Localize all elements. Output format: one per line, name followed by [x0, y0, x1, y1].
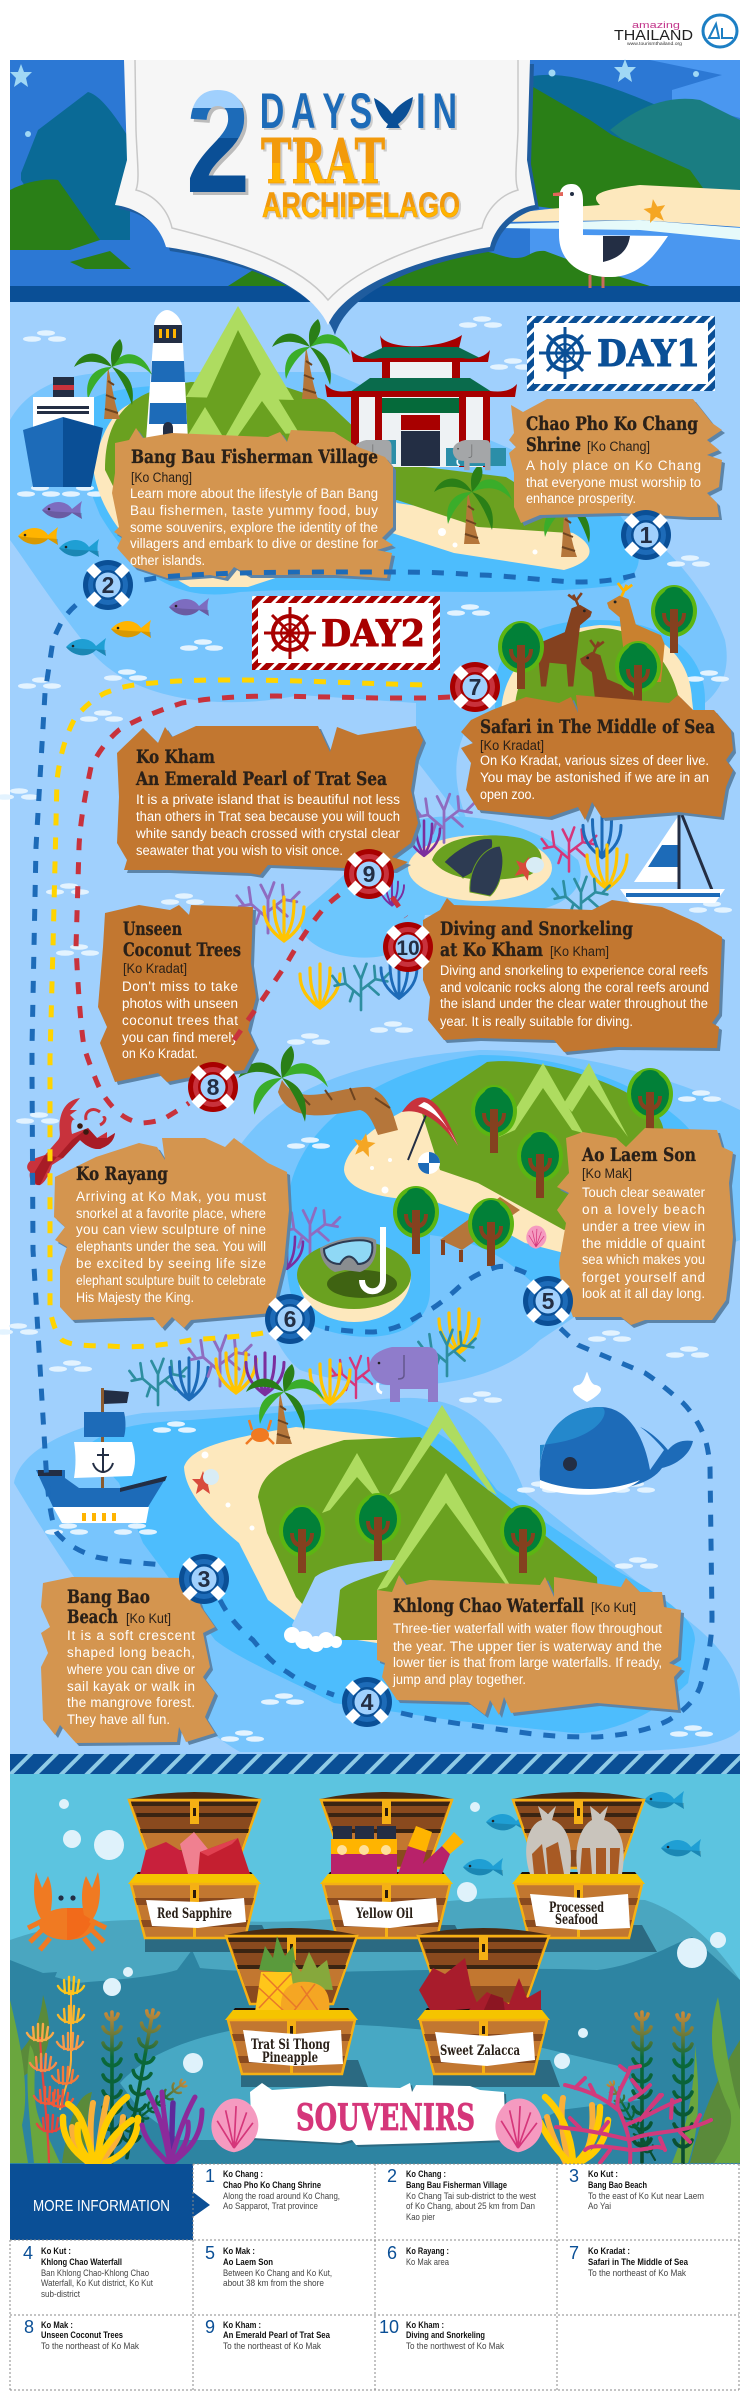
- icon: shell: [211, 2098, 258, 2152]
- card: Diving and Snorkeling: and volcanic rocks along the coral reefs around: [440, 980, 709, 995]
- entry 7: Ko Kradat :: [588, 2246, 630, 2257]
- card: Bang Bao Beach: It is a soft crescent: [67, 1628, 195, 1643]
- entry 3: 3: [569, 2166, 579, 2186]
- card: Bang Bao Beach: shaped long beach,: [67, 1645, 195, 1660]
- icon: stone elephant: [354, 440, 392, 470]
- card: Chao Pho Ko Chang Shrine: [509, 399, 722, 523]
- entry 2: of Ko Chang, about 25 km from Dan: [406, 2201, 535, 2212]
- sea layer: Ko Kham lagoon: [300, 816, 581, 958]
- entry 1: 1: [205, 2166, 215, 2186]
- sea layer: Ao Laem Son inner: [286, 1055, 690, 1337]
- entry 8: Ko Mak :: [41, 2320, 73, 2331]
- logo: Amazing Thailand: THAILAND: [614, 27, 693, 44]
- entry 6: Ko Mak area: [406, 2257, 450, 2268]
- life ring 1: 1: [640, 522, 653, 548]
- entry 3: Bang Bao Beach: [588, 2180, 647, 2191]
- card: Khlong Chao Waterfall: lower tier is that from large waterfalls. If ready,: [393, 1655, 662, 1670]
- icon: pirate ship: [36, 1388, 167, 1523]
- life ring 3: 3: [198, 1566, 210, 1592]
- card: Bang Bau Fisherman Village: Learn more about the lifestyle of Ban Bang: [130, 486, 378, 501]
- card: Bang Bau Fisherman Village: [Ko Chang]: [131, 470, 192, 485]
- icon: shell: [495, 2098, 542, 2152]
- card: Bang Bao Beach: They have all fun.: [67, 1712, 170, 1727]
- more information box: [10, 2164, 210, 2240]
- entry 10: 10: [379, 2317, 399, 2337]
- sea layer: Ao Laem Son: [239, 1050, 740, 1385]
- icon: beach ball: [418, 1152, 440, 1174]
- entry 9: An Emerald Pearl of Trat Sea: [223, 2330, 331, 2341]
- icon: waterfall foam: [284, 1627, 342, 1652]
- card: Safari in The Middle of Sea: On Ko Kradat, various sizes of deer live.: [480, 753, 709, 768]
- icon: seagull: [553, 184, 668, 288]
- life ring 3: [179, 1554, 229, 1604]
- card: Khlong Chao Waterfall: Three-tier waterfall with water flow throughout: [393, 1621, 662, 1636]
- corals: Ko Kham: [237, 794, 627, 1010]
- coral: yellow left: [63, 2097, 138, 2163]
- route: day 2 red dashed path: [76, 696, 450, 1123]
- entry 7: [569, 2243, 689, 2279]
- badge: Day 2: DAY2: [321, 613, 425, 655]
- entry 10: Ko Kham :: [406, 2320, 444, 2331]
- logo: Amazing Thailand: amazing: [632, 20, 680, 30]
- chest: Processed Seafood: [512, 1792, 645, 1938]
- entry 7: To the northeast of Ko Mak: [588, 2268, 686, 2279]
- card: Diving and Snorkeling: [Ko Kham]: [550, 944, 609, 959]
- entry 2: Bang Bau Fisherman Village: [406, 2180, 507, 2191]
- sea layer: Ko Chang and Ko Kradat: [10, 372, 727, 830]
- icon: snorkel: [362, 1227, 383, 1291]
- card: Bang Bau Fisherman Village: Bang Bau Fisherman Village: [131, 446, 378, 468]
- card: Bang Bau Fisherman Village: Bau fishermen, taste yummy food, buy: [130, 503, 378, 518]
- entry 6: [387, 2243, 450, 2268]
- life ring 4: 4: [361, 1689, 374, 1715]
- card: Chao Pho Ko Chang Shrine: Chao Pho Ko Chang: [526, 413, 698, 435]
- card: Ko Rayang: Ko Rayang: [76, 1163, 168, 1185]
- banner: Souvenirs: SOUVENIRS: [296, 2097, 475, 2139]
- title shield: [115, 60, 539, 335]
- card: Unseen Coconut Trees: photos with unseen: [122, 996, 238, 1011]
- entry 10: To the northwest of Ko Mak: [406, 2341, 504, 2352]
- life ring 8: [188, 1062, 238, 1112]
- life ring 4: [342, 1677, 392, 1727]
- card: Ao Laem Son: Touch clear seawater: [582, 1185, 705, 1200]
- coral: yellow right: [540, 2097, 608, 2163]
- card: Khlong Chao Waterfall: jump and play together.: [392, 1672, 526, 1687]
- card: Ao Laem Son: forget yourself and: [582, 1270, 705, 1285]
- card: Ko Rayang: elephants under the sea. You will: [76, 1239, 266, 1254]
- card: Ko Rayang: elephant sculpture built to celebrate: [76, 1273, 266, 1288]
- entry 7: 7: [569, 2243, 579, 2263]
- entry 5: about 38 km from the shore: [223, 2278, 324, 2289]
- island: Ko Kradat with deer: [498, 583, 697, 734]
- card: Bang Bao Beach: Bang Bao: [67, 1586, 150, 1608]
- map background: [10, 302, 740, 1754]
- icon: ship wheel: [264, 607, 316, 659]
- card: Khlong Chao Waterfall: Khlong Chao Waterfall: [393, 1595, 584, 1617]
- entry 9: To the northeast of Ko Mak: [223, 2341, 321, 2352]
- life ring 7: [450, 662, 500, 712]
- entry 2: Ko Chang Tai sub-district to the west: [406, 2191, 536, 2202]
- badge: Day 1: [527, 316, 715, 391]
- card: Ko Kham: An Emerald Pearl of Trat Sea: [135, 768, 387, 790]
- chest: Red Sapphire: [128, 1792, 261, 1938]
- entry 3: Ao Yai: [588, 2201, 611, 2212]
- banner: Souvenirs: [211, 2083, 542, 2152]
- icon: shrine: [325, 335, 517, 467]
- icon: beach umbrella: [402, 1097, 458, 1160]
- label: Red Sapphire: [157, 1906, 232, 1922]
- entry 4: Khlong Chao Waterfall: [41, 2257, 122, 2268]
- icon: cruise ship: [23, 377, 103, 487]
- entry 9: Ko Kham :: [223, 2320, 261, 2331]
- island: Ko Kut: [184, 1405, 600, 1652]
- card: Diving and Snorkeling: year. It is really suitable for diving.: [440, 1014, 633, 1029]
- life ring 2: [83, 560, 133, 610]
- card: Ao Laem Son: [557, 1128, 733, 1325]
- entry 3: To the east of Ko Kut near Laem: [588, 2191, 704, 2202]
- plants: leafy stems right: [605, 2012, 692, 2163]
- icon: diving mask: [320, 1237, 376, 1272]
- entry 4: Ko Kut :: [41, 2246, 71, 2257]
- card: Diving and Snorkeling: the island under the clear water throughout the: [440, 996, 708, 1011]
- card: Unseen Coconut Trees: Coconut Trees: [123, 939, 241, 961]
- plants: leafy stems left: [103, 2008, 189, 2162]
- entry 4: 4: [23, 2243, 33, 2263]
- card: Safari in The Middle of Sea: [461, 695, 733, 820]
- icon: palm tree: [246, 1364, 324, 1444]
- life ring 5: 5: [542, 1288, 555, 1314]
- life ring 9: [344, 849, 394, 899]
- sea layer: Ko Kut inner: [86, 1409, 695, 1733]
- icon: shell: [526, 1226, 546, 1249]
- icon: lobster: [27, 1098, 115, 1185]
- chest: Sweet Zalacca: [417, 1928, 550, 2074]
- card: Chao Pho Ko Chang Shrine: that everyone must worship to: [526, 475, 701, 490]
- life ring 9: 9: [363, 861, 375, 887]
- card: Chao Pho Ko Chang Shrine: enhance prosperity.: [526, 491, 636, 506]
- bubbles: [59, 1799, 726, 2073]
- undersea souvenirs panel: [10, 1774, 740, 2165]
- icon: stone elephant: [453, 440, 490, 470]
- card: Chao Pho Ko Chang Shrine: A holy place on Ko Chang: [526, 458, 701, 473]
- sea layer: Ko Kut: [14, 1398, 740, 1752]
- entry 6: 6: [387, 2243, 397, 2263]
- card: Bang Bao Beach: [Ko Kut]: [126, 1611, 171, 1626]
- icon: shell: [203, 1469, 219, 1485]
- entry 4: sub-district: [41, 2289, 80, 2300]
- entry 2: Ko Chang :: [406, 2169, 446, 2180]
- card: Chao Pho Ko Chang Shrine: [Ko Chang]: [587, 439, 650, 454]
- card: Ao Laem Son: on a lovely beach: [582, 1202, 705, 1217]
- icon: bent palm: [238, 1046, 398, 1135]
- card: Ao Laem Son: Ao Laem Son: [581, 1144, 696, 1166]
- card: Ao Laem Son: [Ko Mak]: [582, 1166, 632, 1181]
- icon: starfish: [351, 1131, 377, 1158]
- life ring 8: 8: [207, 1074, 220, 1100]
- card: Unseen Coconut Trees: on Ko Kradat.: [122, 1046, 198, 1061]
- card: Ko Kham: It is a private island that is beautiful not less: [136, 792, 400, 807]
- card: Ko Rayang: snorkel at a favorite place, where: [76, 1206, 266, 1221]
- card: Ko Rayang: be excited by seeing life size: [76, 1256, 266, 1271]
- entry 1: Ao Sapparot, Trat province: [223, 2201, 318, 2212]
- fish school: [463, 1791, 701, 1876]
- icon: big crab: [28, 1872, 106, 1950]
- card: Diving and Snorkeling: Diving and snorkeling to experience coral reefs: [440, 963, 708, 978]
- card: Khlong Chao Waterfall: the year. The upper tier is waterway and the: [393, 1639, 662, 1654]
- entry 10: Diving and Snorkeling: [406, 2330, 485, 2341]
- card: Bang Bao Beach: sail kayak or walk in: [67, 1679, 195, 1694]
- entry 4: Ban Khlong Chao-Khlong Chao: [41, 2268, 149, 2279]
- icon: lighthouse: [146, 310, 188, 440]
- card: Bang Bau Fisherman Village: some souvenirs, explore the identity of the: [130, 520, 378, 535]
- entry 8: Unseen Coconut Trees: [41, 2330, 123, 2341]
- entry 10: [379, 2317, 504, 2352]
- entry 1: Chao Pho Ko Chang Shrine: [223, 2180, 321, 2191]
- badge: Day 1: DAY1: [597, 333, 700, 375]
- card: Ko Kham: seawater that you wish to visit once.: [136, 843, 343, 858]
- entry 8: To the northeast of Ko Mak: [41, 2341, 139, 2352]
- entry 1: [205, 2166, 340, 2212]
- entry 1: Along the road around Ko Chang,: [223, 2191, 340, 2202]
- card: Ao Laem Son: look at it all day long.: [582, 1286, 705, 1301]
- icon: palm tree: [74, 339, 152, 419]
- label: Seafood: [555, 1912, 598, 1928]
- card: Safari in The Middle of Sea: You may be astonished if we are in an: [480, 770, 709, 785]
- icon: palm tree: [272, 319, 350, 399]
- card: Ao Laem Son: the middle of quaint: [582, 1236, 705, 1251]
- badge: Day 2: [252, 596, 440, 670]
- icon: whale: [540, 1372, 693, 1495]
- title number: 2: [186, 60, 250, 223]
- info table: [10, 2164, 740, 2399]
- entry 6: Ko Rayang :: [406, 2246, 449, 2257]
- card: Bang Bau Fisherman Village: villagers and embark to dive or destine for: [130, 536, 378, 551]
- hero panel: [10, 59, 740, 286]
- card: Ao Laem Son: under a tree view in: [582, 1219, 705, 1234]
- seaweed: left: [10, 1995, 92, 2163]
- card: Unseen Coconut Trees: [98, 905, 256, 1082]
- life ring 10: 10: [396, 937, 420, 960]
- card: Diving and Snorkeling: [423, 898, 722, 1052]
- card: Ao Laem Son: sea which makes you: [582, 1252, 705, 1267]
- chest: Trat Si Thong Pineapple: [225, 1928, 358, 2074]
- card: Unseen Coconut Trees: [Ko Kradat]: [123, 961, 187, 976]
- route: day 1 blue dashed path: [32, 572, 712, 1737]
- sea layer: inner Ko Chang: [70, 385, 639, 594]
- coral: purple left: [142, 2092, 202, 2163]
- card: Bang Bau Fisherman Village: [112, 428, 393, 578]
- icon: small crab: [246, 1420, 274, 1444]
- card: Bang Bao Beach: the mangrove forest.: [67, 1695, 195, 1710]
- life ring 5: [523, 1276, 573, 1326]
- logo: round seal: [703, 15, 737, 47]
- entry 2: [387, 2166, 536, 2223]
- card: Unseen Coconut Trees: you can find merely: [122, 1030, 238, 1045]
- life ring 2: 2: [102, 572, 114, 598]
- card: Ko Kham: [117, 726, 423, 875]
- entry 1: Ko Chang :: [223, 2169, 263, 2180]
- life ring 1: [621, 510, 671, 560]
- life ring 7: 7: [469, 674, 481, 700]
- title line: Archipelago: ARCHIPELAGO: [262, 186, 460, 225]
- entry 5: 5: [205, 2243, 215, 2263]
- label: Yellow Oil: [355, 1906, 413, 1922]
- island: Ao Laem Son: [344, 1061, 673, 1266]
- entry 4: Waterfall, Ko Kut district, Ko Kut: [41, 2278, 153, 2289]
- logo: Amazing Thailand: [614, 20, 693, 46]
- coral: pink right: [556, 2066, 711, 2163]
- card: Unseen Coconut Trees: Unseen: [123, 918, 182, 940]
- title line: Trat: TRAT: [261, 125, 385, 198]
- island: Ko Kham with fins: [408, 835, 552, 901]
- life ring 10: [383, 922, 433, 972]
- card: Unseen Coconut Trees: coconut trees that: [122, 1013, 238, 1028]
- entry 5: [205, 2243, 332, 2289]
- card: Diving and Snorkeling: Diving and Snorkeling: [440, 918, 633, 940]
- card: Safari in The Middle of Sea: [Ko Kradat]: [480, 738, 544, 753]
- plants: orange whorled stems: [27, 1977, 84, 2163]
- entry 5: Ko Mak :: [223, 2246, 255, 2257]
- label: Sweet Zalacca: [440, 2043, 520, 2059]
- card: Safari in The Middle of Sea: open zoo.: [480, 787, 535, 802]
- card: Khlong Chao Waterfall: [Ko Kut]: [591, 1600, 636, 1615]
- icon: purple elephant: [369, 1347, 438, 1402]
- card: Unseen Coconut Trees: Don't miss to take: [122, 979, 238, 994]
- entry 3: Ko Kut :: [588, 2169, 618, 2180]
- more information box: MORE INFORMATION: [33, 2198, 170, 2215]
- waves: [0, 316, 732, 1742]
- entry 5: Between Ko Chang and Ko Kut,: [223, 2268, 332, 2279]
- entry 2: Kao pier: [406, 2212, 435, 2223]
- entry 9: 9: [205, 2317, 215, 2337]
- entry 2: 2: [387, 2166, 397, 2186]
- entry 9: [205, 2317, 331, 2352]
- card: Ko Kham: than others in Trat sea because you will touch: [136, 809, 400, 824]
- band under hero: [10, 286, 740, 302]
- entry 3: [569, 2166, 704, 2212]
- life ring 6: 6: [284, 1306, 296, 1332]
- card: Ko Kham: Ko Kham: [136, 746, 215, 768]
- chest: Yellow Oil: [320, 1792, 464, 1938]
- card: Ko Kham: white sandy beach crossed with crystal clear: [135, 826, 400, 841]
- card: Bang Bao Beach: Beach: [67, 1606, 118, 1628]
- card: Diving and Snorkeling: at Ko Kham: [440, 939, 543, 961]
- entry 7: Safari in The Middle of Sea: [588, 2257, 689, 2268]
- label: Pineapple: [262, 2050, 318, 2066]
- icon: wooden pier: [440, 1197, 520, 1262]
- icon: sailboat: [620, 815, 725, 903]
- logo: Amazing Thailand: www.tourismthailand.org: [627, 41, 683, 46]
- corals: lower reef: [129, 1309, 479, 1405]
- card: Ko Rayang: [54, 1138, 289, 1328]
- card: Bang Bao Beach: where you can dive or: [66, 1662, 195, 1677]
- fish: [18, 501, 209, 656]
- icon: palm tree: [434, 464, 512, 544]
- entry 4: [23, 2243, 153, 2300]
- card: Ko Rayang: you can view sculpture of nine: [76, 1222, 266, 1237]
- island: Ko Chang: [74, 306, 609, 587]
- island: Ko Rayang snorkel: [271, 1208, 411, 1322]
- icon: ship wheel: [539, 327, 591, 379]
- title line: Days In: DAYSIN: [260, 84, 457, 140]
- entry 5: Ao Laem Son: [223, 2257, 273, 2268]
- icon: palm tree: [531, 477, 609, 557]
- card: Khlong Chao Waterfall: [377, 1575, 682, 1715]
- rope divider: [10, 1754, 740, 1774]
- label: Trat Si Thong: [251, 2037, 330, 2053]
- card: Ko Rayang: Arriving at Ko Mak, you must: [76, 1189, 266, 1204]
- seaweed: right: [672, 1997, 740, 2163]
- card: Chao Pho Ko Chang Shrine: Shrine: [526, 434, 581, 456]
- card: Bang Bao Beach: [41, 1577, 215, 1743]
- life ring 6: [265, 1294, 315, 1344]
- card: Bang Bau Fisherman Village: other islands.: [130, 553, 205, 568]
- card: Ko Rayang: His Majesty the King.: [76, 1290, 194, 1305]
- sea layer: Ko Kradat: [495, 620, 705, 722]
- label: Processed: [549, 1900, 604, 1916]
- chest shadows: [145, 1925, 657, 2087]
- entry 8: [24, 2317, 139, 2352]
- icon: red starfish: [192, 1471, 214, 1494]
- route: day 2 yellow dashed path: [50, 680, 430, 1347]
- entry 8: 8: [24, 2317, 34, 2337]
